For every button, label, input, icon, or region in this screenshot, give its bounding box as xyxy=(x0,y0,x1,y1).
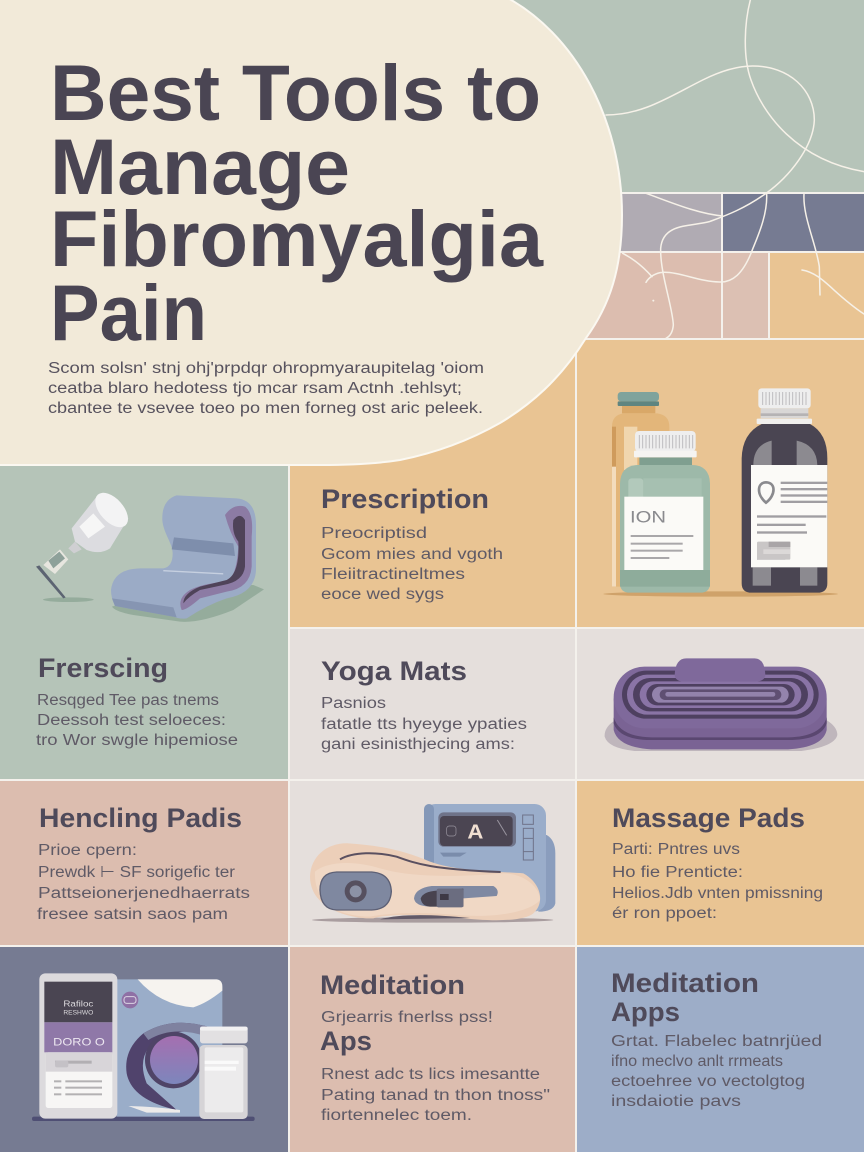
panel: cream title blob xyxy=(0,0,622,465)
description: Prioe cpern: xyxy=(38,842,137,859)
icon: bottle cluster xyxy=(603,388,838,597)
heading: Frerscing xyxy=(38,653,168,683)
panel: Massage Pads xyxy=(577,781,864,945)
panel: yoga mat image xyxy=(577,629,864,779)
icon: bottle cluster: ION xyxy=(630,508,666,527)
panel: prescription bottles image xyxy=(577,340,864,627)
description: Resqged Tee pas tnems xyxy=(37,692,219,709)
description xyxy=(321,1066,550,1124)
description: Fleiitractineltmes xyxy=(321,566,465,583)
description xyxy=(36,692,238,749)
description: Parti: Pntres uvs xyxy=(612,841,740,858)
title xyxy=(50,48,544,357)
panel: massage device image xyxy=(290,781,575,945)
heading: Yoga Mats xyxy=(321,656,467,686)
description: fatatle tts hyeyge ypaties xyxy=(321,716,527,733)
intro text block: ceatba blaro hedotess tjo mcar rsam Actnh .tehlsyt; xyxy=(48,380,462,397)
description xyxy=(37,842,250,923)
icon: roll and applicator xyxy=(36,487,264,622)
heading: Hencling Padis xyxy=(39,803,242,833)
description: Pating tanad tn thon tnoss" xyxy=(321,1087,550,1104)
description: ifno meclvo anlt rrmeats xyxy=(611,1053,783,1070)
description: Preocriptisd xyxy=(321,525,427,542)
description: fiortennelec toem. xyxy=(321,1107,472,1124)
description xyxy=(611,1033,822,1110)
description: Pattseionerjenedhaerrats xyxy=(38,885,250,902)
description: Grtat. Flabelec batnrjüed xyxy=(611,1033,822,1050)
description: tro Wor swgle hipemiose xyxy=(36,732,238,749)
intro text block: Scom solsn' stnj ohj'prpdqr ohropmyaraupitelag 'oiom xyxy=(48,360,484,377)
description: Helios.Jdb vnten pmissning xyxy=(612,885,823,902)
icon: phone, lens card and bottle: RESHWO xyxy=(63,1011,94,1017)
description: ér ron ppoet: xyxy=(612,905,717,922)
intro text block: cbantee te vsevee toeo po men forneg ost aric peleek. xyxy=(48,400,483,417)
heading: Massage Pads xyxy=(612,803,805,833)
description top: Grjearris fnerlss pss! xyxy=(321,1009,493,1026)
description: fresee satsin saos pam xyxy=(37,906,228,923)
panel: phone app image xyxy=(0,947,288,1152)
panel: Hencling Padis xyxy=(0,781,288,945)
icon: handheld massager with control unit: A xyxy=(467,820,483,843)
title: Fibromyalgia xyxy=(50,194,544,283)
icon: purple coiled mat xyxy=(605,658,837,751)
icon: phone, lens card and bottle xyxy=(32,973,255,1121)
icon: phone, lens card and bottle: DORO O xyxy=(53,1037,105,1049)
panel: Meditation Aps xyxy=(290,947,575,1152)
description xyxy=(321,695,527,753)
description: insdaiotie pavs xyxy=(611,1093,741,1110)
heading xyxy=(611,968,759,1027)
heading: Prescription xyxy=(321,484,489,514)
panel: Meditation Apps xyxy=(577,947,864,1152)
description xyxy=(612,841,823,922)
description: Ho fie Prenticte: xyxy=(612,864,743,881)
description: gani esinisthjecing ams: xyxy=(321,736,515,753)
title: Manage xyxy=(50,122,350,211)
icon: handheld massager with control unit xyxy=(310,804,555,923)
description: ectoehree vo vectolgtog xyxy=(611,1073,805,1090)
title: Best Tools to xyxy=(50,48,541,137)
heading: Meditation xyxy=(320,970,465,1000)
description: eoce wed sygs xyxy=(321,586,444,603)
heading continuation: Aps xyxy=(320,1026,372,1056)
description: Prewdk ⊢ SF sorigefic ter xyxy=(38,864,235,881)
heading: Apps xyxy=(611,997,680,1027)
description: Gcom mies and vgoth xyxy=(321,546,503,563)
panel: Prescription xyxy=(290,340,575,627)
description xyxy=(321,525,503,603)
description: Rnest adc ts lics imesantte xyxy=(321,1066,540,1083)
heading: Meditation xyxy=(611,968,759,998)
panel: decorative top right blocks xyxy=(500,0,864,338)
panel: Yoga Mats xyxy=(290,629,575,779)
title: Pain xyxy=(50,268,207,357)
intro text block xyxy=(48,360,484,417)
icon: phone, lens card and bottle: Rafiloc xyxy=(63,999,93,1009)
description: Deessoh test seloeces: xyxy=(37,712,226,729)
panel: Frerscing xyxy=(0,466,288,779)
description: Pasnios xyxy=(321,695,386,712)
